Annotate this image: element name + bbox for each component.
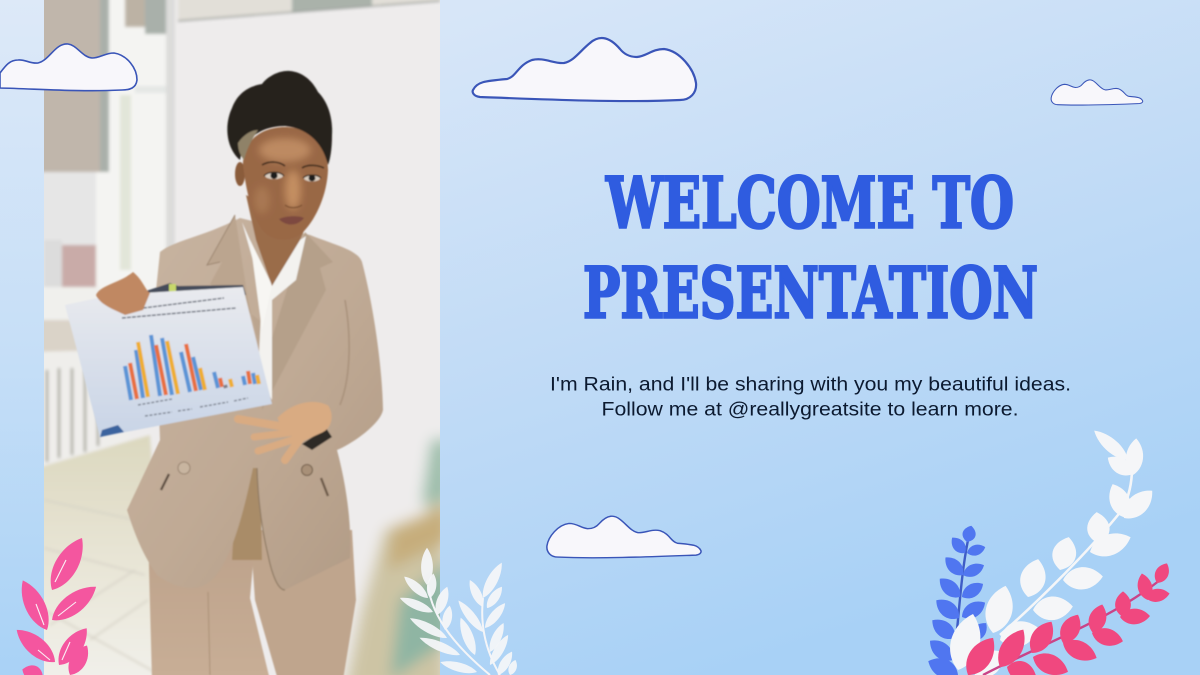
left hand: [96, 272, 150, 315]
blazer buttons and pockets: [161, 462, 328, 496]
trousers: [148, 530, 356, 675]
white shirt: [242, 222, 306, 400]
left gradient strip: [0, 0, 44, 675]
blazer: [127, 215, 383, 590]
inner garment: [232, 460, 262, 560]
photo backdrop: window: [44, 0, 175, 352]
cloud: top left: [0, 44, 137, 91]
body text: [550, 374, 1071, 420]
cloud: top centre: [473, 38, 696, 101]
chart legend marks: [138, 398, 248, 416]
leaves: bottom right white branch: [944, 426, 1159, 675]
photo: presenter holding a chart: [30, 0, 460, 675]
photo backdrop: blurred plant: [345, 440, 450, 675]
photo backdrop: radiator: [44, 350, 101, 464]
right hand: [238, 402, 331, 460]
photo backdrop: tiled floor: [44, 434, 152, 672]
title: [583, 162, 1038, 334]
photo backdrop: wall: [30, 0, 460, 675]
leaves: bottom left pink sprig: [11, 532, 102, 675]
face: [235, 127, 328, 240]
cloud: top right: [1051, 80, 1143, 105]
bar chart: [125, 335, 259, 400]
leaves: bottom right pink branch: [959, 560, 1173, 675]
photo backdrop: ceiling band: [178, 0, 450, 21]
chart paper heading lines: [122, 298, 236, 318]
body text: I'm Rain, and I'll be sharing with you my beautiful ideas.: [550, 374, 1071, 396]
leaves: bottom right blue branch: [924, 524, 1009, 675]
hair: [227, 71, 332, 165]
title line 1: WELCOME TO: [605, 162, 1014, 244]
chart paper: [65, 287, 272, 437]
papers behind chart: [146, 282, 246, 296]
body text: Follow me at @reallygreatsite to learn more.: [602, 400, 1018, 420]
neck: [246, 195, 306, 286]
cloud: lower centre: [547, 516, 701, 558]
wrist cuff and watch: [302, 428, 332, 450]
leaves: bottom centre white sprigs: [398, 548, 519, 675]
